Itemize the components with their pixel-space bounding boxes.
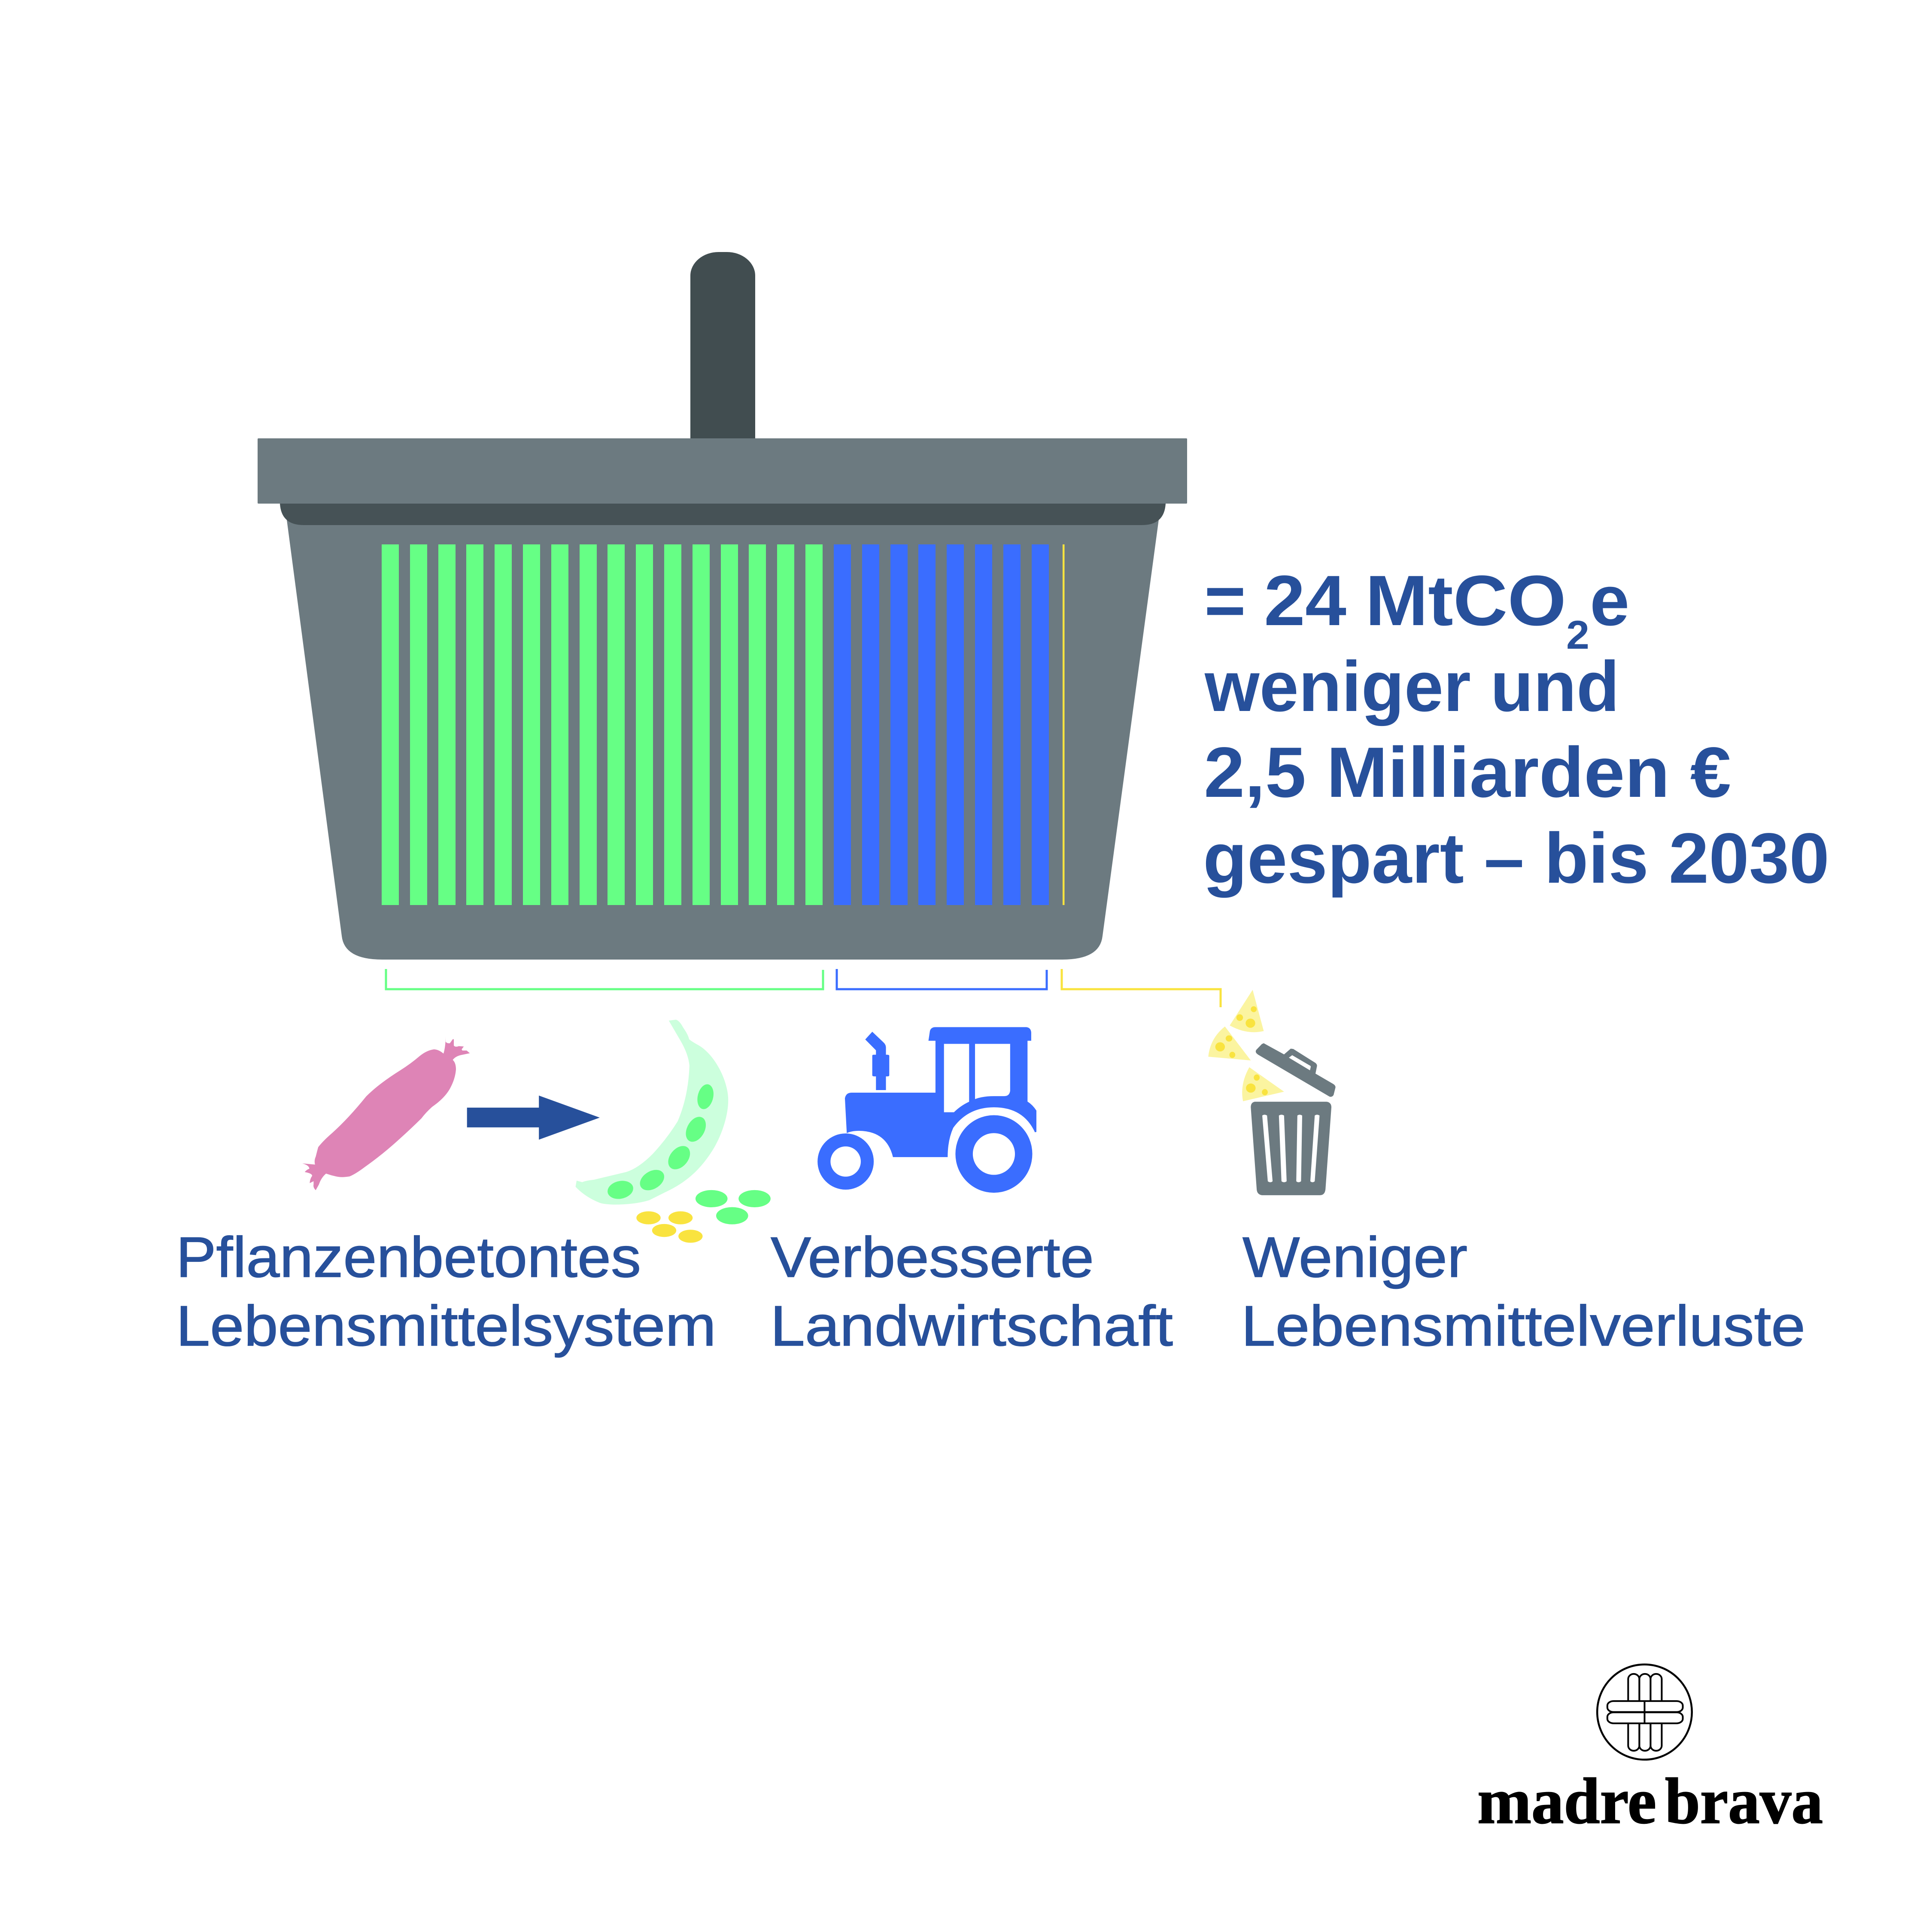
basket handle bbox=[690, 252, 755, 442]
blue bars: improved agriculture bbox=[834, 544, 1049, 905]
icon: sausage bbox=[302, 1036, 470, 1190]
yellow bracket bbox=[1062, 969, 1221, 1007]
label: plant-based food system: Pflanzenbetontes bbox=[176, 1226, 641, 1289]
label: plant-based food system bbox=[176, 1226, 716, 1358]
yellow bar: less food loss bbox=[1063, 544, 1065, 905]
basket rim bbox=[258, 438, 1187, 504]
icon: tractor bbox=[817, 1027, 1036, 1193]
headline text bbox=[1203, 561, 1829, 898]
headline text: 2,5 Milliarden € bbox=[1204, 733, 1731, 812]
blue bracket bbox=[837, 969, 1047, 989]
headline text: 2 bbox=[1566, 612, 1589, 657]
label: improved agriculture: Verbesserte bbox=[771, 1226, 1094, 1289]
headline text: = bbox=[1204, 561, 1246, 641]
icon: bean pod with seeds bbox=[576, 1020, 771, 1243]
icon: trash can bbox=[1251, 1043, 1336, 1195]
label: plant-based food system: Lebensmittelsystem bbox=[176, 1294, 716, 1358]
shopping basket bbox=[258, 252, 1187, 960]
headline text: MtCO bbox=[1365, 561, 1566, 641]
headline text: gespart – bis 2030 bbox=[1203, 819, 1829, 898]
logo wordmark bbox=[1477, 1765, 1823, 1837]
label: improved agriculture bbox=[770, 1226, 1173, 1358]
logo wordmark: brava bbox=[1665, 1765, 1823, 1837]
green bracket bbox=[386, 969, 823, 989]
basket body bbox=[285, 504, 1161, 960]
logo wordmark: madre bbox=[1477, 1765, 1656, 1837]
label: less food loss bbox=[1241, 1226, 1805, 1358]
label: less food loss: Weniger bbox=[1242, 1226, 1467, 1289]
arrow: sausage to beans bbox=[467, 1096, 600, 1139]
headline text: weniger und bbox=[1204, 647, 1619, 726]
label: improved agriculture: Landwirtschaft bbox=[770, 1294, 1173, 1358]
logo emblem bbox=[1597, 1665, 1692, 1760]
headline text: 24 bbox=[1264, 561, 1346, 641]
headline text: e bbox=[1590, 561, 1629, 641]
label: less food loss: Lebensmittelverluste bbox=[1241, 1294, 1805, 1358]
green bars: plant-based food system bbox=[382, 544, 823, 905]
basket inner rim shadow bbox=[280, 504, 1166, 525]
icon: cheese slices bbox=[1208, 990, 1284, 1101]
